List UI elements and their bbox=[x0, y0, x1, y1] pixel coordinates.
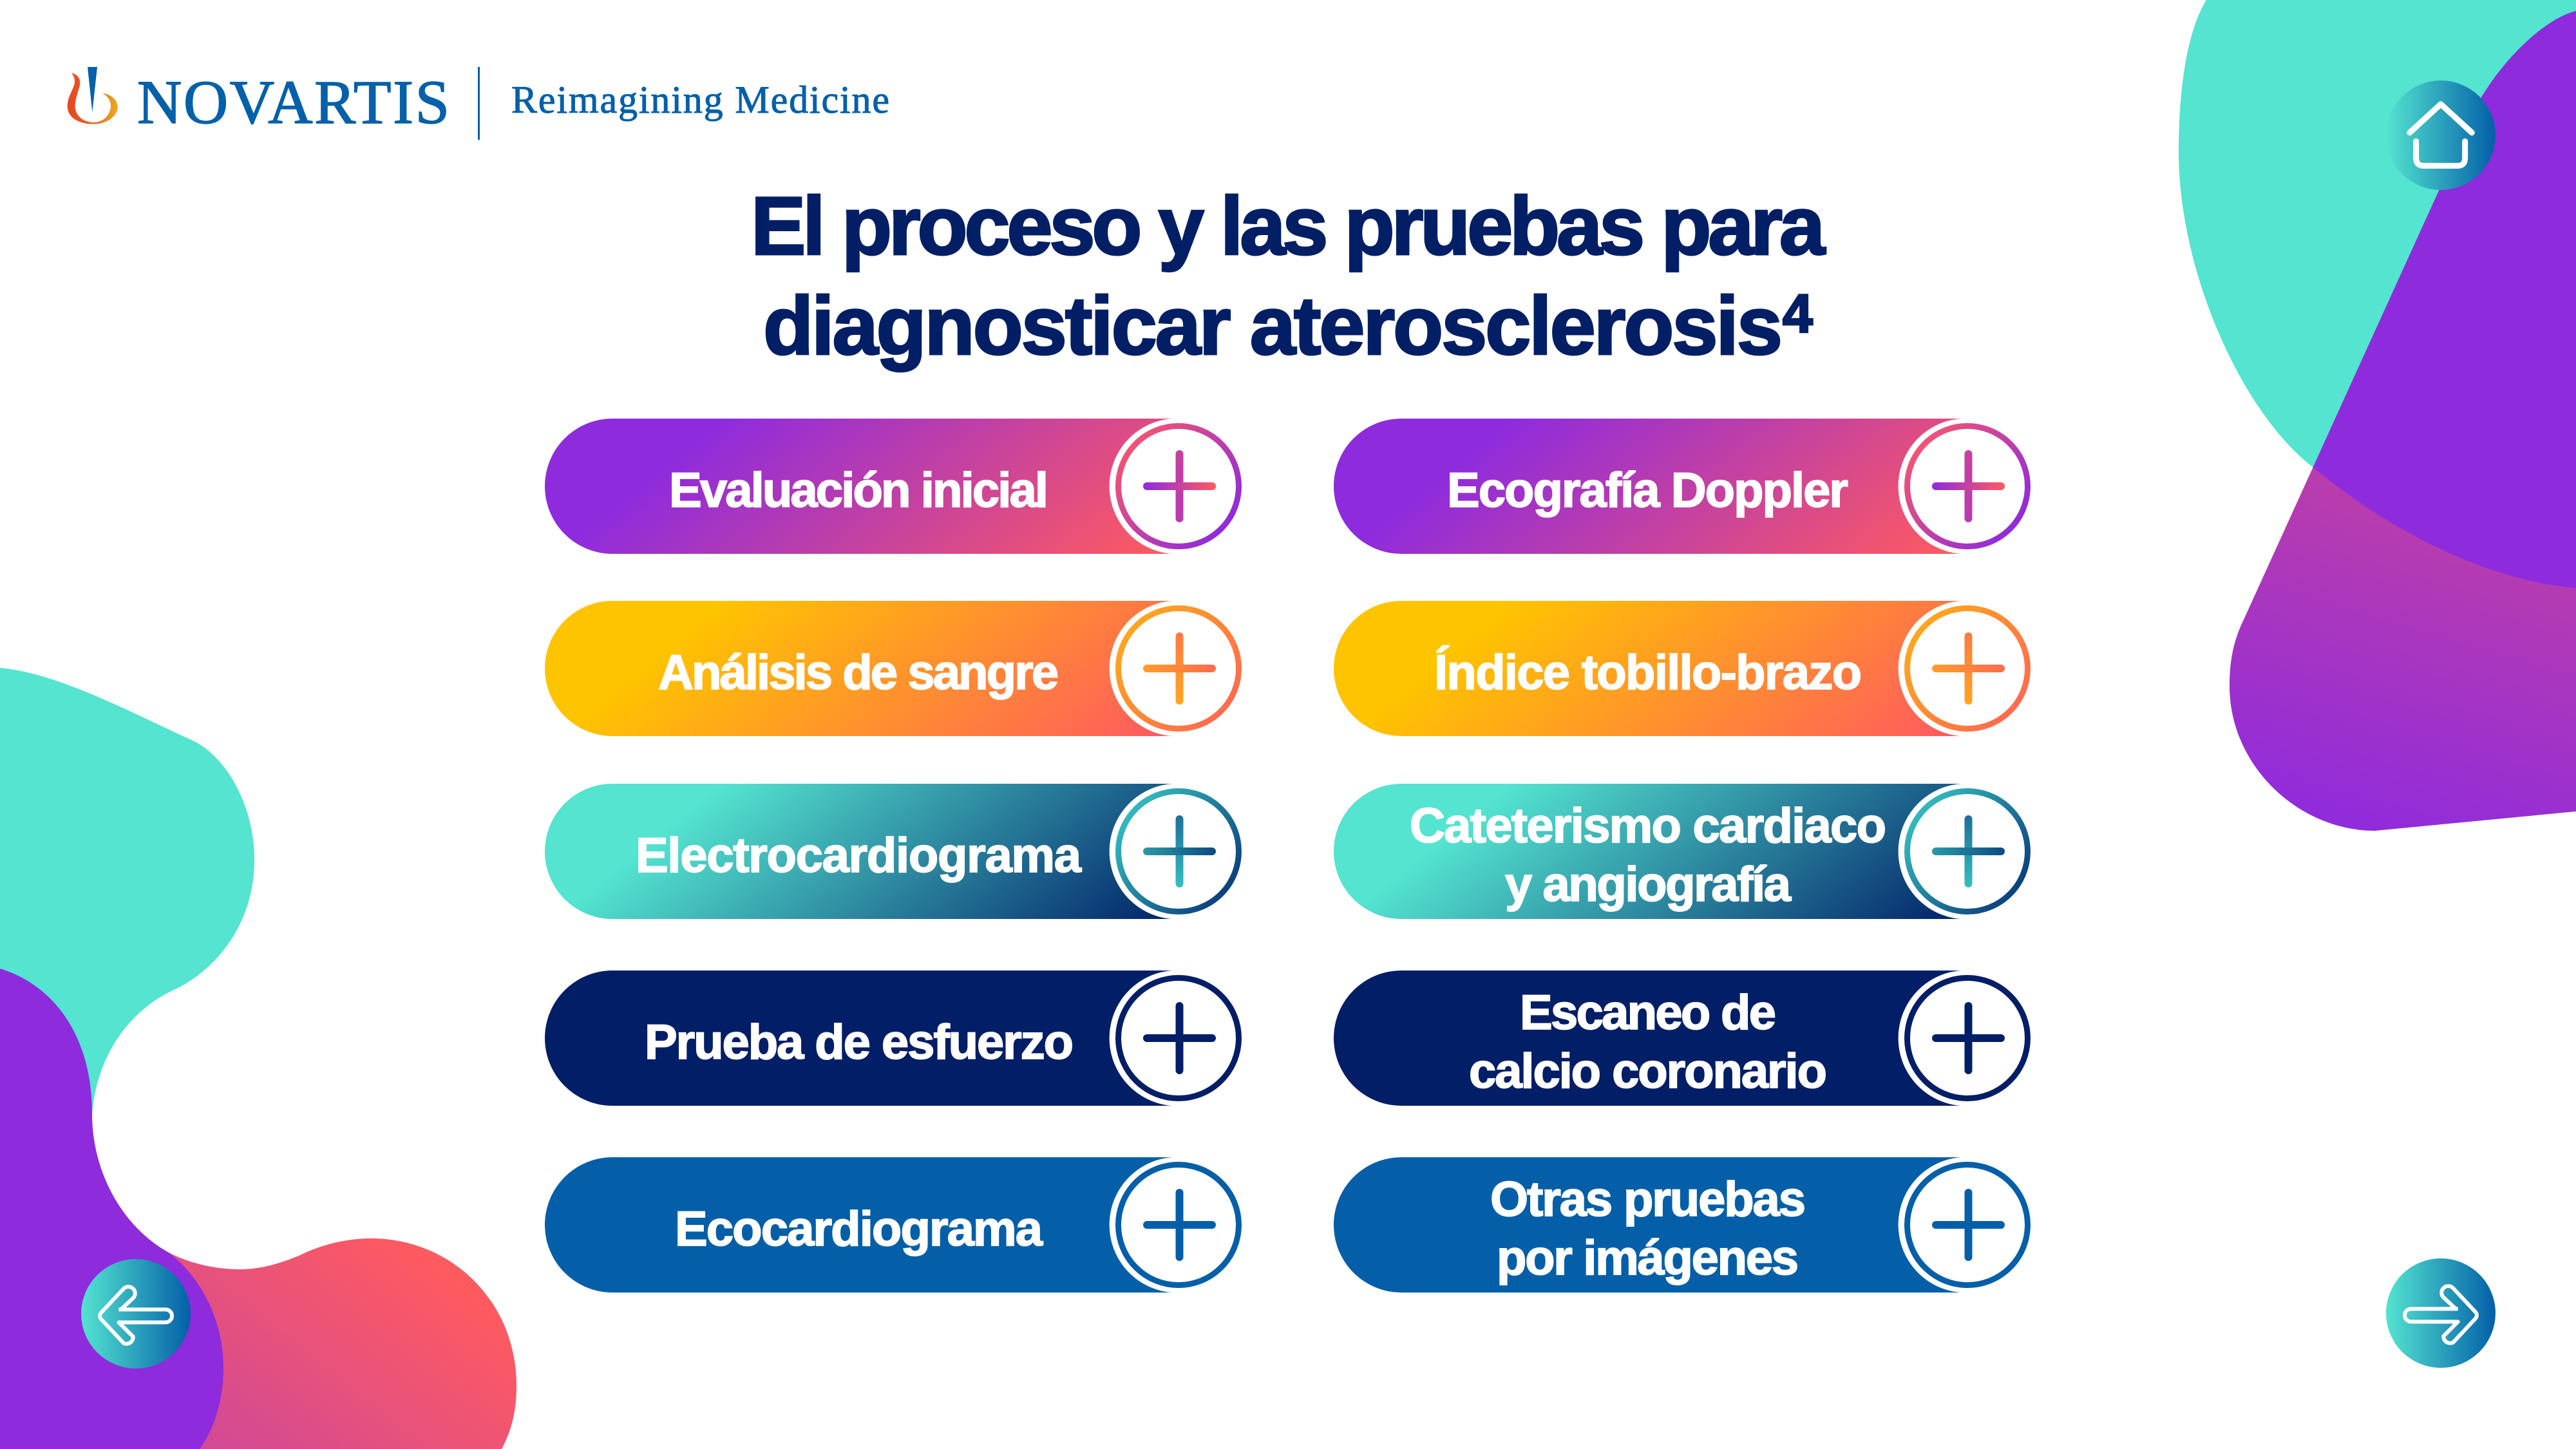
button: Ecografía Doppler: Ecografía Doppler bbox=[1447, 463, 1848, 518]
decorative shape: top-right purple blob bbox=[2230, 11, 2576, 831]
button: Escaneo de calcio coronario: calcio coronario bbox=[1469, 1044, 1827, 1099]
button: Índice tobillo-brazo: Índice tobillo-brazo bbox=[1434, 645, 1862, 700]
button: Prueba de esfuerzo: Prueba de esfuerzo bbox=[645, 1015, 1074, 1070]
button: Prueba de esfuerzo bbox=[545, 971, 1239, 1106]
decorative shape: top-right purple overlap bbox=[2313, 11, 2576, 588]
logo: Novartis Reimagining Medicine bbox=[68, 67, 889, 140]
arrow: previous button bbox=[81, 1259, 191, 1368]
icon: plus bbox=[1118, 791, 1239, 912]
decorative shape: bottom-left coral blob bbox=[169, 1238, 516, 1449]
title bbox=[751, 180, 1826, 372]
wordmark: NOVARTIS: NOVARTIS bbox=[137, 68, 450, 137]
button: Análisis de sangre: Análisis de sangre bbox=[658, 645, 1059, 700]
icon: plus bbox=[1908, 1164, 2027, 1285]
button: Otras pruebas por imágenes: por imágenes bbox=[1497, 1231, 1799, 1285]
button: Electrocardiograma bbox=[545, 784, 1239, 919]
button: Electrocardiograma: Electrocardiograma bbox=[636, 828, 1082, 883]
icon: plus bbox=[1118, 426, 1239, 546]
button: Ecografía Doppler bbox=[1334, 419, 2027, 554]
button: Ecocardiograma: Ecocardiograma bbox=[675, 1202, 1043, 1256]
button: Otras pruebas por imágenes bbox=[1334, 1157, 2027, 1293]
decorative shape: top-right teal blob bbox=[2179, 0, 2576, 588]
tagline: Reimagining Medicine: Reimagining Medicine bbox=[511, 79, 889, 121]
button: Cateterismo cardiaco y angiografía: y angiografía bbox=[1505, 857, 1792, 912]
button: Otras pruebas por imágenes: Otras pruebas bbox=[1490, 1172, 1806, 1227]
icon: plus bbox=[1118, 608, 1239, 729]
icon: plus bbox=[1908, 978, 2027, 1099]
icon: plus bbox=[1118, 978, 1239, 1099]
button: Cateterismo cardiaco y angiografía: Cateterismo cardiaco bbox=[1410, 799, 1886, 853]
title: diagnosticar aterosclerosis bbox=[763, 280, 1783, 372]
icon: home button bbox=[2386, 80, 2496, 190]
icon: Novartis flame bbox=[68, 67, 118, 124]
button: Escaneo de calcio coronario bbox=[1334, 971, 2027, 1106]
button: Cateterismo cardiaco y angiografía bbox=[1334, 784, 2027, 919]
arrow: next button bbox=[2386, 1258, 2496, 1368]
button: Evaluación inicial: Evaluación inicial bbox=[669, 463, 1048, 518]
title: El proceso y las pruebas para bbox=[751, 180, 1826, 272]
decorative shape: bottom-left purple blob bbox=[0, 969, 223, 1449]
button: Escaneo de calcio coronario: Escaneo de bbox=[1520, 985, 1776, 1040]
button: Análisis de sangre bbox=[545, 601, 1239, 736]
button: Índice tobillo-brazo bbox=[1334, 601, 2027, 736]
icon: plus bbox=[1118, 1164, 1239, 1285]
icon: plus bbox=[1908, 426, 2027, 546]
title: 4 bbox=[1783, 283, 1813, 344]
button: Ecocardiograma bbox=[545, 1157, 1239, 1293]
icon: plus bbox=[1908, 608, 2027, 729]
decorative shape: bottom-left teal blob bbox=[0, 668, 254, 1159]
icon: plus bbox=[1908, 791, 2027, 912]
button: Evaluación inicial bbox=[545, 419, 1239, 554]
